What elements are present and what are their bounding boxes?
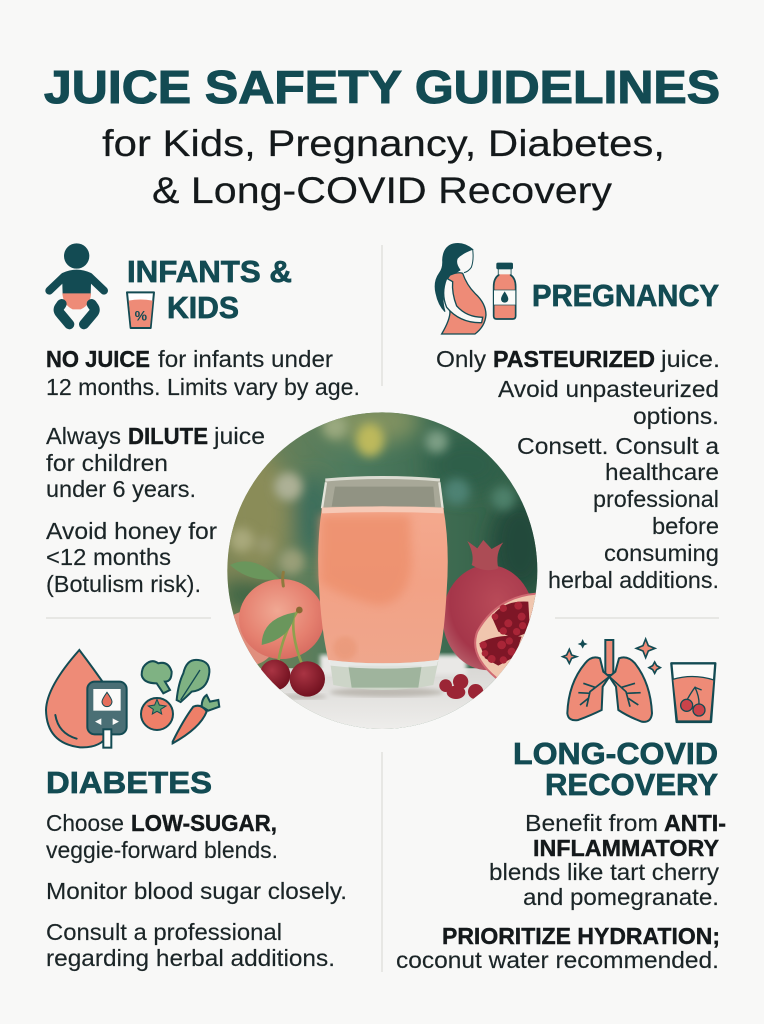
text: pregnancy guidance: Only — [436, 346, 487, 372]
text: diabetes guidance: Choose — [46, 810, 124, 836]
table — [260, 668, 504, 729]
title: & Long-COVID Recovery — [152, 169, 612, 211]
title — [44, 61, 720, 211]
text: infants guidance: Avoid honey for — [46, 518, 217, 544]
text: diabetes guidance: veggie-forward blends. — [46, 837, 278, 863]
loose seeds — [439, 674, 483, 699]
cherries — [278, 610, 302, 663]
photo: glass of juice with fruit — [227, 412, 538, 729]
text: infants guidance: <12 months — [46, 544, 171, 570]
text: diabetes guidance — [46, 810, 347, 971]
text: pregnancy guidance — [436, 346, 720, 593]
text: pregnancy guidance: PASTEURIZED — [493, 346, 655, 372]
icon: juice glass with percent — [127, 292, 154, 328]
panel: infants and kids — [46, 243, 360, 597]
text: infants guidance — [46, 346, 360, 597]
text: pregnancy guidance: consuming — [604, 540, 719, 566]
icon: blood drop and glucose meter — [46, 650, 127, 748]
text: long-covid guidance: Benefit from — [525, 810, 658, 836]
icon: baby — [49, 243, 104, 324]
icon: vegetables — [141, 660, 219, 743]
text: diabetes guidance: LOW-SUGAR, — [131, 810, 277, 836]
heading: long-covid recovery: LONG-COVID — [513, 736, 718, 771]
text: long-covid guidance — [396, 810, 726, 973]
text: pregnancy guidance: healthcare — [605, 459, 719, 485]
text: diabetes guidance: Monitor blood sugar closely. — [46, 878, 347, 904]
icon: juice glass with percent: % — [135, 308, 148, 324]
icon: juice bottle — [494, 263, 516, 319]
panel: diabetes — [46, 650, 347, 971]
apples — [234, 612, 269, 664]
text: infants guidance: juice — [213, 423, 265, 449]
title: for Kids, Pregnancy, Diabetes, — [102, 122, 665, 164]
panel: pregnancy — [435, 243, 720, 593]
text: infants guidance: 12 months. Limits vary by age. — [46, 374, 360, 400]
heading: infants and kids: KIDS — [167, 290, 239, 325]
heading: long-covid recovery: RECOVERY — [545, 767, 718, 802]
text: infants guidance: Always — [46, 423, 121, 449]
text: pregnancy guidance: juice. — [660, 346, 720, 372]
text: long-covid guidance: blends like tart cherry — [489, 859, 720, 885]
panel: long-covid recovery — [396, 639, 726, 973]
text: pregnancy guidance: Avoid unpasteurized — [498, 376, 719, 402]
glass — [321, 477, 444, 512]
text: pregnancy guidance: professional — [593, 486, 719, 512]
text: infants guidance: for infants under — [158, 346, 333, 372]
icon: cherry juice glass — [671, 663, 715, 722]
pomegranate — [443, 565, 534, 670]
heading: infants and kids — [127, 254, 292, 325]
title: JUICE SAFETY GUIDELINES — [44, 61, 720, 113]
text: pregnancy guidance: before — [652, 513, 719, 539]
heading: infants and kids: INFANTS & — [127, 254, 292, 289]
text: long-covid guidance: INFLAMMATORY — [533, 835, 719, 861]
text: long-covid guidance: and pomegranate. — [523, 884, 719, 910]
text: diabetes guidance: regarding herbal additions. — [46, 945, 335, 971]
text: diabetes guidance: Consult a professional — [46, 919, 282, 945]
heading: diabetes: DIABETES — [46, 765, 212, 800]
text: pregnancy guidance: herbal additions. — [548, 567, 719, 593]
text: infants guidance: (Botulism risk). — [46, 571, 201, 597]
text: pregnancy guidance: options. — [633, 403, 719, 429]
text: long-covid guidance: ANTI- — [664, 810, 726, 836]
icon: lungs with sparkles — [563, 639, 660, 722]
text: long-covid guidance: coconut water recommended. — [396, 947, 719, 973]
icon: pregnant woman — [435, 243, 486, 334]
heading: pregnancy: PREGNANCY — [532, 278, 719, 313]
text: infants guidance: NO JUICE — [46, 346, 150, 372]
text: pregnancy guidance: Consett. Consult a — [517, 433, 719, 459]
text: long-covid guidance: PRIORITIZE HYDRATION; — [442, 923, 720, 949]
heading: long-covid recovery — [513, 736, 718, 802]
text: infants guidance: under 6 years. — [46, 476, 196, 502]
text: infants guidance: for children — [46, 450, 168, 476]
text: infants guidance: DILUTE — [128, 423, 208, 449]
